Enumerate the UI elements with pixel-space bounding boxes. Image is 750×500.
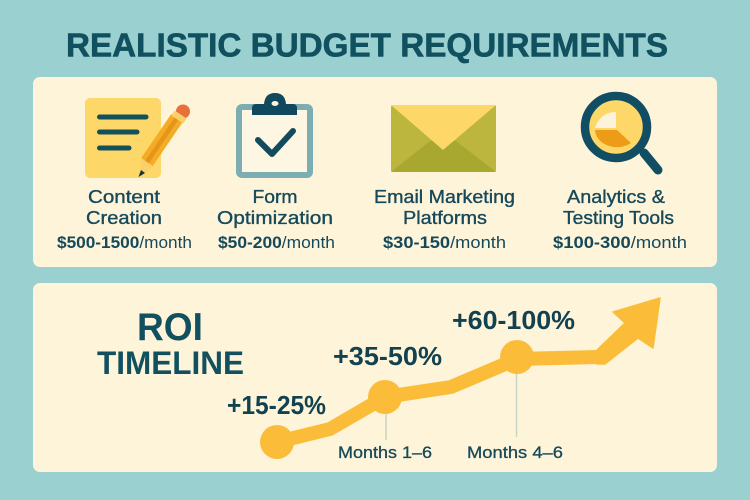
text: analytics and testing tools: $100-300 /month (553, 234, 687, 252)
value: +35-50%: +35-50% (333, 343, 442, 371)
text: email marketing platforms: $30-150 /month (383, 234, 506, 252)
text: content creation: Creation (86, 208, 162, 228)
leader lines (386, 372, 516, 440)
text: form optimization: Optimization (217, 208, 333, 228)
text: email marketing platforms: Platforms (403, 208, 487, 228)
title: REALISTIC BUDGET REQUIREMENTS (66, 26, 668, 64)
text: form optimization: Form (252, 187, 298, 207)
heading: ROI timeline (97, 306, 244, 381)
label: months 1-6: Months 1–6 (338, 443, 432, 462)
heading: ROI timeline: ROI (137, 306, 203, 349)
text: form optimization: $50-200/month (218, 234, 335, 252)
text: email marketing platforms: Email Marketing (374, 187, 515, 207)
panel: ROI timeline (33, 283, 717, 472)
text: content creation (57, 187, 192, 252)
icon: clipboard with check (239, 93, 310, 175)
panel: budget items (33, 77, 717, 267)
icon: document and pencil (85, 98, 190, 178)
text: email marketing platforms (374, 187, 515, 252)
icon: magnifying glass with pie (585, 96, 658, 170)
chart: rising arrow (260, 298, 660, 459)
text: analytics and testing tools: Testing Tools (563, 208, 674, 228)
text: analytics and testing tools: Analytics & (567, 187, 665, 207)
text: content creation: Content (88, 187, 160, 207)
label: months 4-6: Months 4–6 (467, 443, 563, 462)
value: +60-100%: +60-100% (452, 307, 575, 335)
text: form optimization (217, 187, 335, 252)
icon: envelope (391, 105, 496, 172)
value: +15-25%: +15-25% (227, 392, 326, 420)
text: content creation: $500-1500/month (57, 234, 192, 252)
heading: ROI timeline: TIMELINE (97, 345, 244, 381)
text: analytics and testing tools (553, 187, 687, 252)
